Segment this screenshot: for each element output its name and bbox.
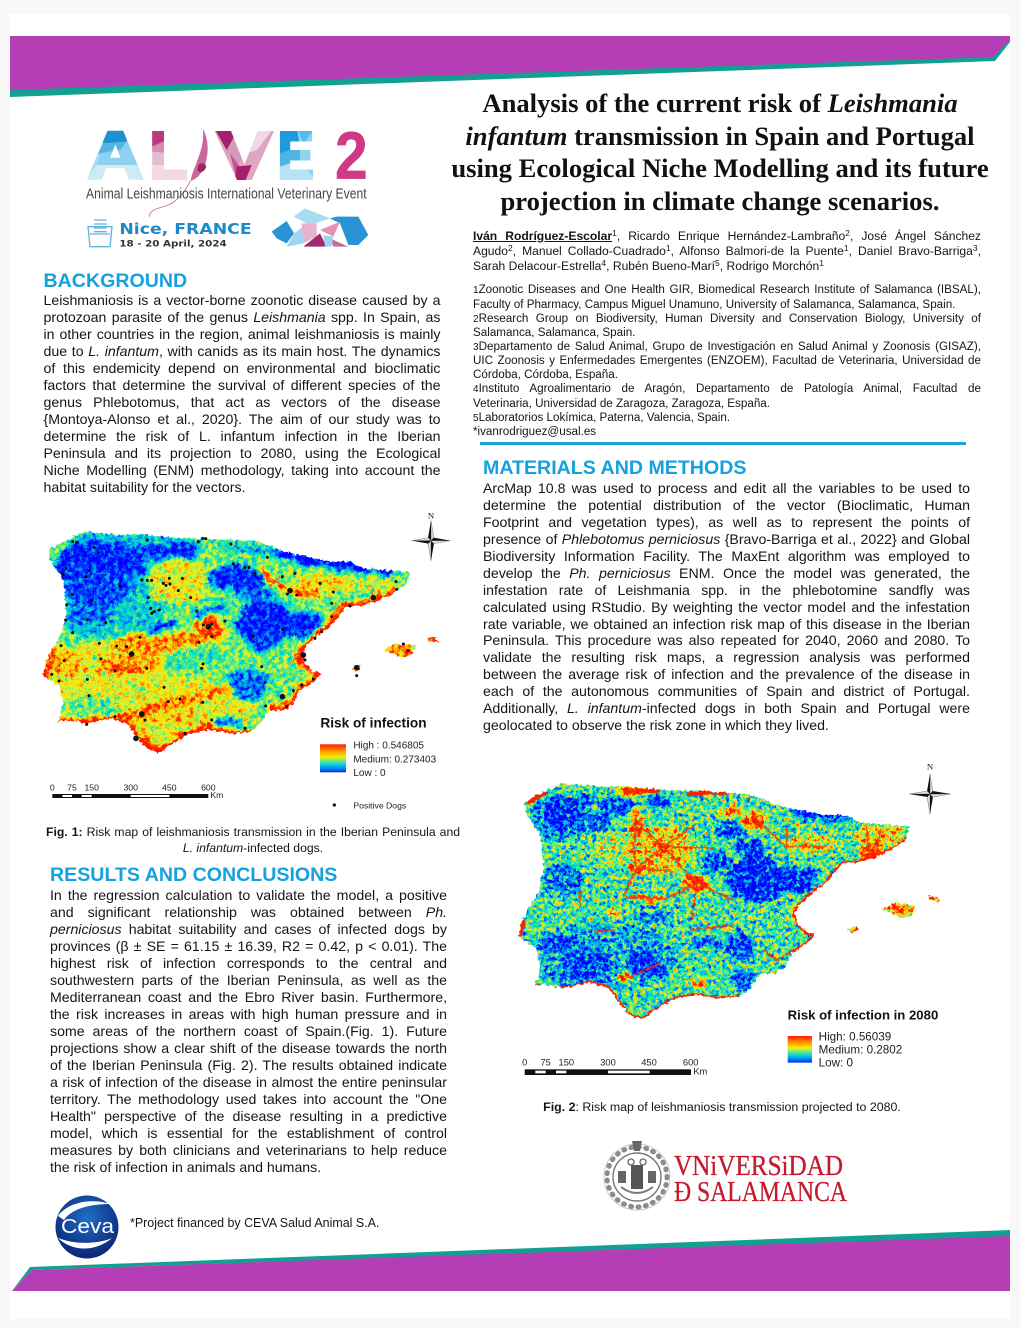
logo wordmark [87,119,368,193]
text: background: protozoan parasite of the genus Leishmania spp. In Spain, as [44,309,440,325]
icon: origami animals [272,208,368,247]
scale bar: 300 [600,1057,616,1067]
text: background: in other countries in the region, animal leishmaniosis is mainly [44,326,440,342]
icon: compass: N [927,761,934,771]
text: background: factors that determine the survival of different species of the [44,377,440,393]
university seal [604,1141,670,1210]
icon: books [88,220,112,247]
large positive dog clusters [132,591,373,738]
authors: Agudo2, Manuel Collado-Cuadrado1, Alfonso Balmori-de la Puente1, Daniel Bravo-Barriga3, [473,242,981,258]
affiliations: 3Departamento de Salud Animal, Grupo de Investigación en Salud Animal y Zoonosis (GISAZ), [473,340,981,353]
affiliations: 5Laboratorios Lokímica, Paterna, Valencia, Spain. [473,411,730,424]
text: materials and methods: determine the potential distribution of the vector (Bioclimatic, Human [483,497,970,513]
legend: risk of infection in 2080: Low: 0 [819,1057,854,1070]
affiliations: 1Zoonotic Diseases and One Health GIR, Biomedical Research Institute of Salamanca (IBSAL), [473,283,981,296]
text: materials and methods [483,480,970,733]
affiliations: Veterinaria, Universidad de Zaragoza, Zaragoza, España. [473,397,770,410]
university wordmark: VNiVERSiDAD [674,1151,843,1182]
text: background [44,292,440,495]
text: materials and methods: between the average risk of infection and the prevalence of the disease in [483,666,970,682]
text: materials and methods: infestation rate of Leishmania spp. in the phlebotomine sandfly was [483,582,970,598]
heat map: Iberian Peninsula [42,530,440,754]
icon: compass [412,511,450,561]
event place and date [119,221,252,250]
heading: background: BACKGROUND [44,270,187,292]
text: materials and methods: Biodiversity Information Facility. The MaxEnt algorithm was employed to [483,548,970,564]
logo: ALIVE 2 event [86,119,368,250]
scale bar: 450 [162,782,177,792]
text: results and conclusions: the risk of infection in animals and humans. [50,1159,321,1175]
scale bar [50,782,223,800]
text: background: Peninsula and its projection to 2080, using the Ecological [44,445,440,461]
text: background: of this endemicity depend on environmental and bioclimatic [44,360,440,376]
logo: Universidad de Salamanca [604,1141,848,1210]
text: background: determine the risk of L. infantum infection in the Iberian [44,428,440,444]
scale bar: Km [210,790,223,800]
text: background: Leishmaniosis is a vector-borne zoonotic disease caused by a [44,292,440,308]
title: infantum transmission in Spain and Portugal [465,121,975,151]
text: materials and methods: rate variable, we obtained an infection risk map of this disease in the Iberian [483,616,970,632]
logo wordmark: E [277,119,314,193]
text: materials and methods: calculated using RStudio. By weighting the vector model and the infestation [483,599,970,615]
affiliations: Salamanca, Salamanca, Spain. [473,326,635,339]
text: results and conclusions: Mediterranean coast and the Ebro River basin. Furthermore, [50,989,447,1005]
legend: risk of infection: Medium: 0.273403 [353,754,437,765]
scale bar: 300 [123,782,138,792]
text: materials and methods: develop the Ph. perniciosus ENM. Once the model was generated, the [483,565,970,581]
legend: risk of infection in 2080 [788,1007,938,1070]
logo: Ceva [56,1196,118,1258]
scale bar: 0 [522,1057,527,1067]
text: materials and methods: ArcMap 10.8 was used to process and edit all the variables to be used to [483,480,970,496]
text: results and conclusions: territory. The methodology used takes into account the "One [50,1091,447,1107]
authors [473,228,981,272]
legend: risk of infection in 2080: Medium: 0.2802 [819,1044,902,1057]
scale bar: Km [693,1067,708,1077]
text: background: due to L. infantum, with canids as its main host. The dynamics [44,343,440,359]
text: results and conclusions: measures by both clinicians and veterinarians to help reduce [50,1142,447,1158]
affiliations: UIC Zoonosis y Enfermedades Emergentes (ENZOEM), Facultad de Veterinaria, Universidad de [473,354,981,367]
text: results and conclusions: the risk increases in areas with high human pressure and in [50,1006,447,1022]
scale bar: 0 [50,782,55,792]
text: results and conclusions: provinces (β ± SE = 61.15 ± 16.39, R2 = 0.42, p < 0.01). The [50,938,447,954]
text: results and conclusions: highest risk of infection corresponds to the central and [50,955,447,971]
caption: figure 2: Fig. 2: Risk map of leishmaniosis transmission projected to 2080. [543,1100,901,1114]
scale bar: 75 [67,782,77,792]
icon: compass [909,761,951,814]
authors: Sarah Delacour-Estrella4, Rubén Bueno-Marí5, Rodrigo Morchón1 [473,258,824,272]
scale bar [522,1057,708,1077]
top decorative band [10,36,1010,97]
text: materials and methods: geolocated to observe the risk zone in which they lived. [483,717,829,733]
caption: figure 1: L. infantum-infected dogs. [183,841,323,855]
text: results and conclusions: and significant relationship was obtained between Ph. [50,904,447,920]
text: results and conclusions: perniciosus habitat suitability and cases of infected dogs by [50,921,447,937]
scale bar: 600 [683,1057,698,1067]
title [451,88,989,216]
scale bar: 150 [84,782,99,792]
text: materials and methods: Peninsula. This procedure was also repeated for 2040, 2060 and 2080. To [483,632,970,648]
scale bar: 75 [540,1057,551,1067]
text: results and conclusions: model, which is essential for the establishment of control [50,1125,447,1141]
coast and road network [520,791,908,1019]
text: results and conclusions: some areas of the northern coast of Spain.(Fig. 1). Future [50,1023,447,1039]
affiliations: 4Instituto Agroalimentario de Aragón, Departamento de Patología Animal, Facultad de [473,382,981,395]
text: background: habitat suitability for the vectors. [44,479,246,495]
title: using Ecological Niche Modelling and its future [451,153,989,183]
logo wordmark: V [217,119,272,193]
affiliations [473,283,981,438]
text: results and conclusions: projections show a clear shift of the disease towards the north [50,1040,447,1056]
text: results and conclusions: a risk of infection of the disease in almost the entire peninsular [50,1074,447,1090]
bottom decorative band [12,1230,1010,1291]
text: background: Niche Modelling (ENM) methodology, taking into account the [44,462,440,478]
text: results and conclusions: Health" perspective of the disease resulting in a predictive [50,1108,447,1124]
text: materials and methods: each of the autonomous communities of Spain and district of Portugal. [483,683,970,699]
legend: risk of infection: Low : 0 [353,768,386,779]
positive dogs markers [52,538,408,733]
authors: Iván Rodríguez-Escolar1, Ricardo Enrique Hernández-Lambraño2, José Ángel Sánchez [473,228,981,242]
icon: parasite [149,129,208,217]
legend: risk of infection: Risk of infection [320,716,427,731]
icon: compass: N [428,511,435,521]
text: materials and methods: Footprint and vegetation types), as well as to represent the points of [483,514,970,530]
text: results and conclusions: In the regression calculation to validate the model, a positive [50,887,447,903]
event place and date: Nice, FRANCE [119,221,252,238]
text: results and conclusions: of the Iberian Peninsula (Fig. 2). The results obtained indicate [50,1057,447,1073]
affiliations: Faculty of Pharmacy, Campus Miguel Unamuno, University of Salamanca, Salamanca, Spain. [473,298,955,311]
university wordmark [674,1151,848,1208]
title: Analysis of the current risk of Leishmania [482,88,958,118]
panel: figure 2 projected risk map [518,761,951,1077]
legend: risk of infection: High : 0.546805 [353,740,424,751]
legend: risk of infection in 2080: High: 0.56039 [819,1031,891,1044]
legend: risk of infection in 2080: Risk of infection in 2080 [788,1007,938,1022]
affiliations: 2Research Group on Biodiversity, Human Diversity and Conservation Biology, University of [473,312,981,325]
caption: figure 1: Fig. 1: Risk map of leishmaniosis transmission in the Iberian Peninsula and [46,825,460,839]
text: results and conclusions [50,887,447,1175]
text: materials and methods: Additionally, L. infantum-infected dogs in both Spain and Portugal were [483,700,970,716]
logo wordmark: A [87,119,143,193]
affiliations: Córdoba, Córdoba, España. [473,368,618,381]
affiliations: *ivanrodriguez@usal.es [473,425,596,438]
logo: Ceva: Ceva [61,1216,115,1238]
logo wordmark: 2 [335,119,368,193]
heat map: Iberian Peninsula 2080 [518,782,940,1021]
logo wordmark: L [149,119,188,193]
funding note: *Project financed by CEVA Salud Animal S.A. [130,1216,379,1230]
text: materials and methods: validate the resulting risk maps, a regression analysis was performed [483,649,970,665]
text: background: {Montoya-Alonso et al., 2020}. The aim of our study was to [44,411,440,427]
event place and date: 18 - 20 April, 2024 [119,240,227,250]
scale bar: 600 [201,782,216,792]
scale bar: 450 [641,1057,657,1067]
legend: risk of infection: Positive Dogs [353,800,407,810]
heading: materials and methods: MATERIALS AND METHODS [483,457,746,479]
text: results and conclusions: southwestern parts of the Iberian Peninsula, as well as the [50,972,447,988]
panel: figure 1 risk map [42,511,450,810]
text: materials and methods: presence of Phlebotomus perniciosus {Bravo-Barriga et al., 2022} and Global [483,531,970,547]
caption: figure 1 [46,825,460,855]
heading: results and conclusions: RESULTS AND CONCLUSIONS [50,864,337,886]
text: background: genus Phlebotomus, that act as vectors of the disease [44,394,440,410]
title: projection in climate change scenarios. [500,186,939,216]
legend: risk of infection [320,716,437,810]
scale bar: 150 [559,1057,574,1067]
